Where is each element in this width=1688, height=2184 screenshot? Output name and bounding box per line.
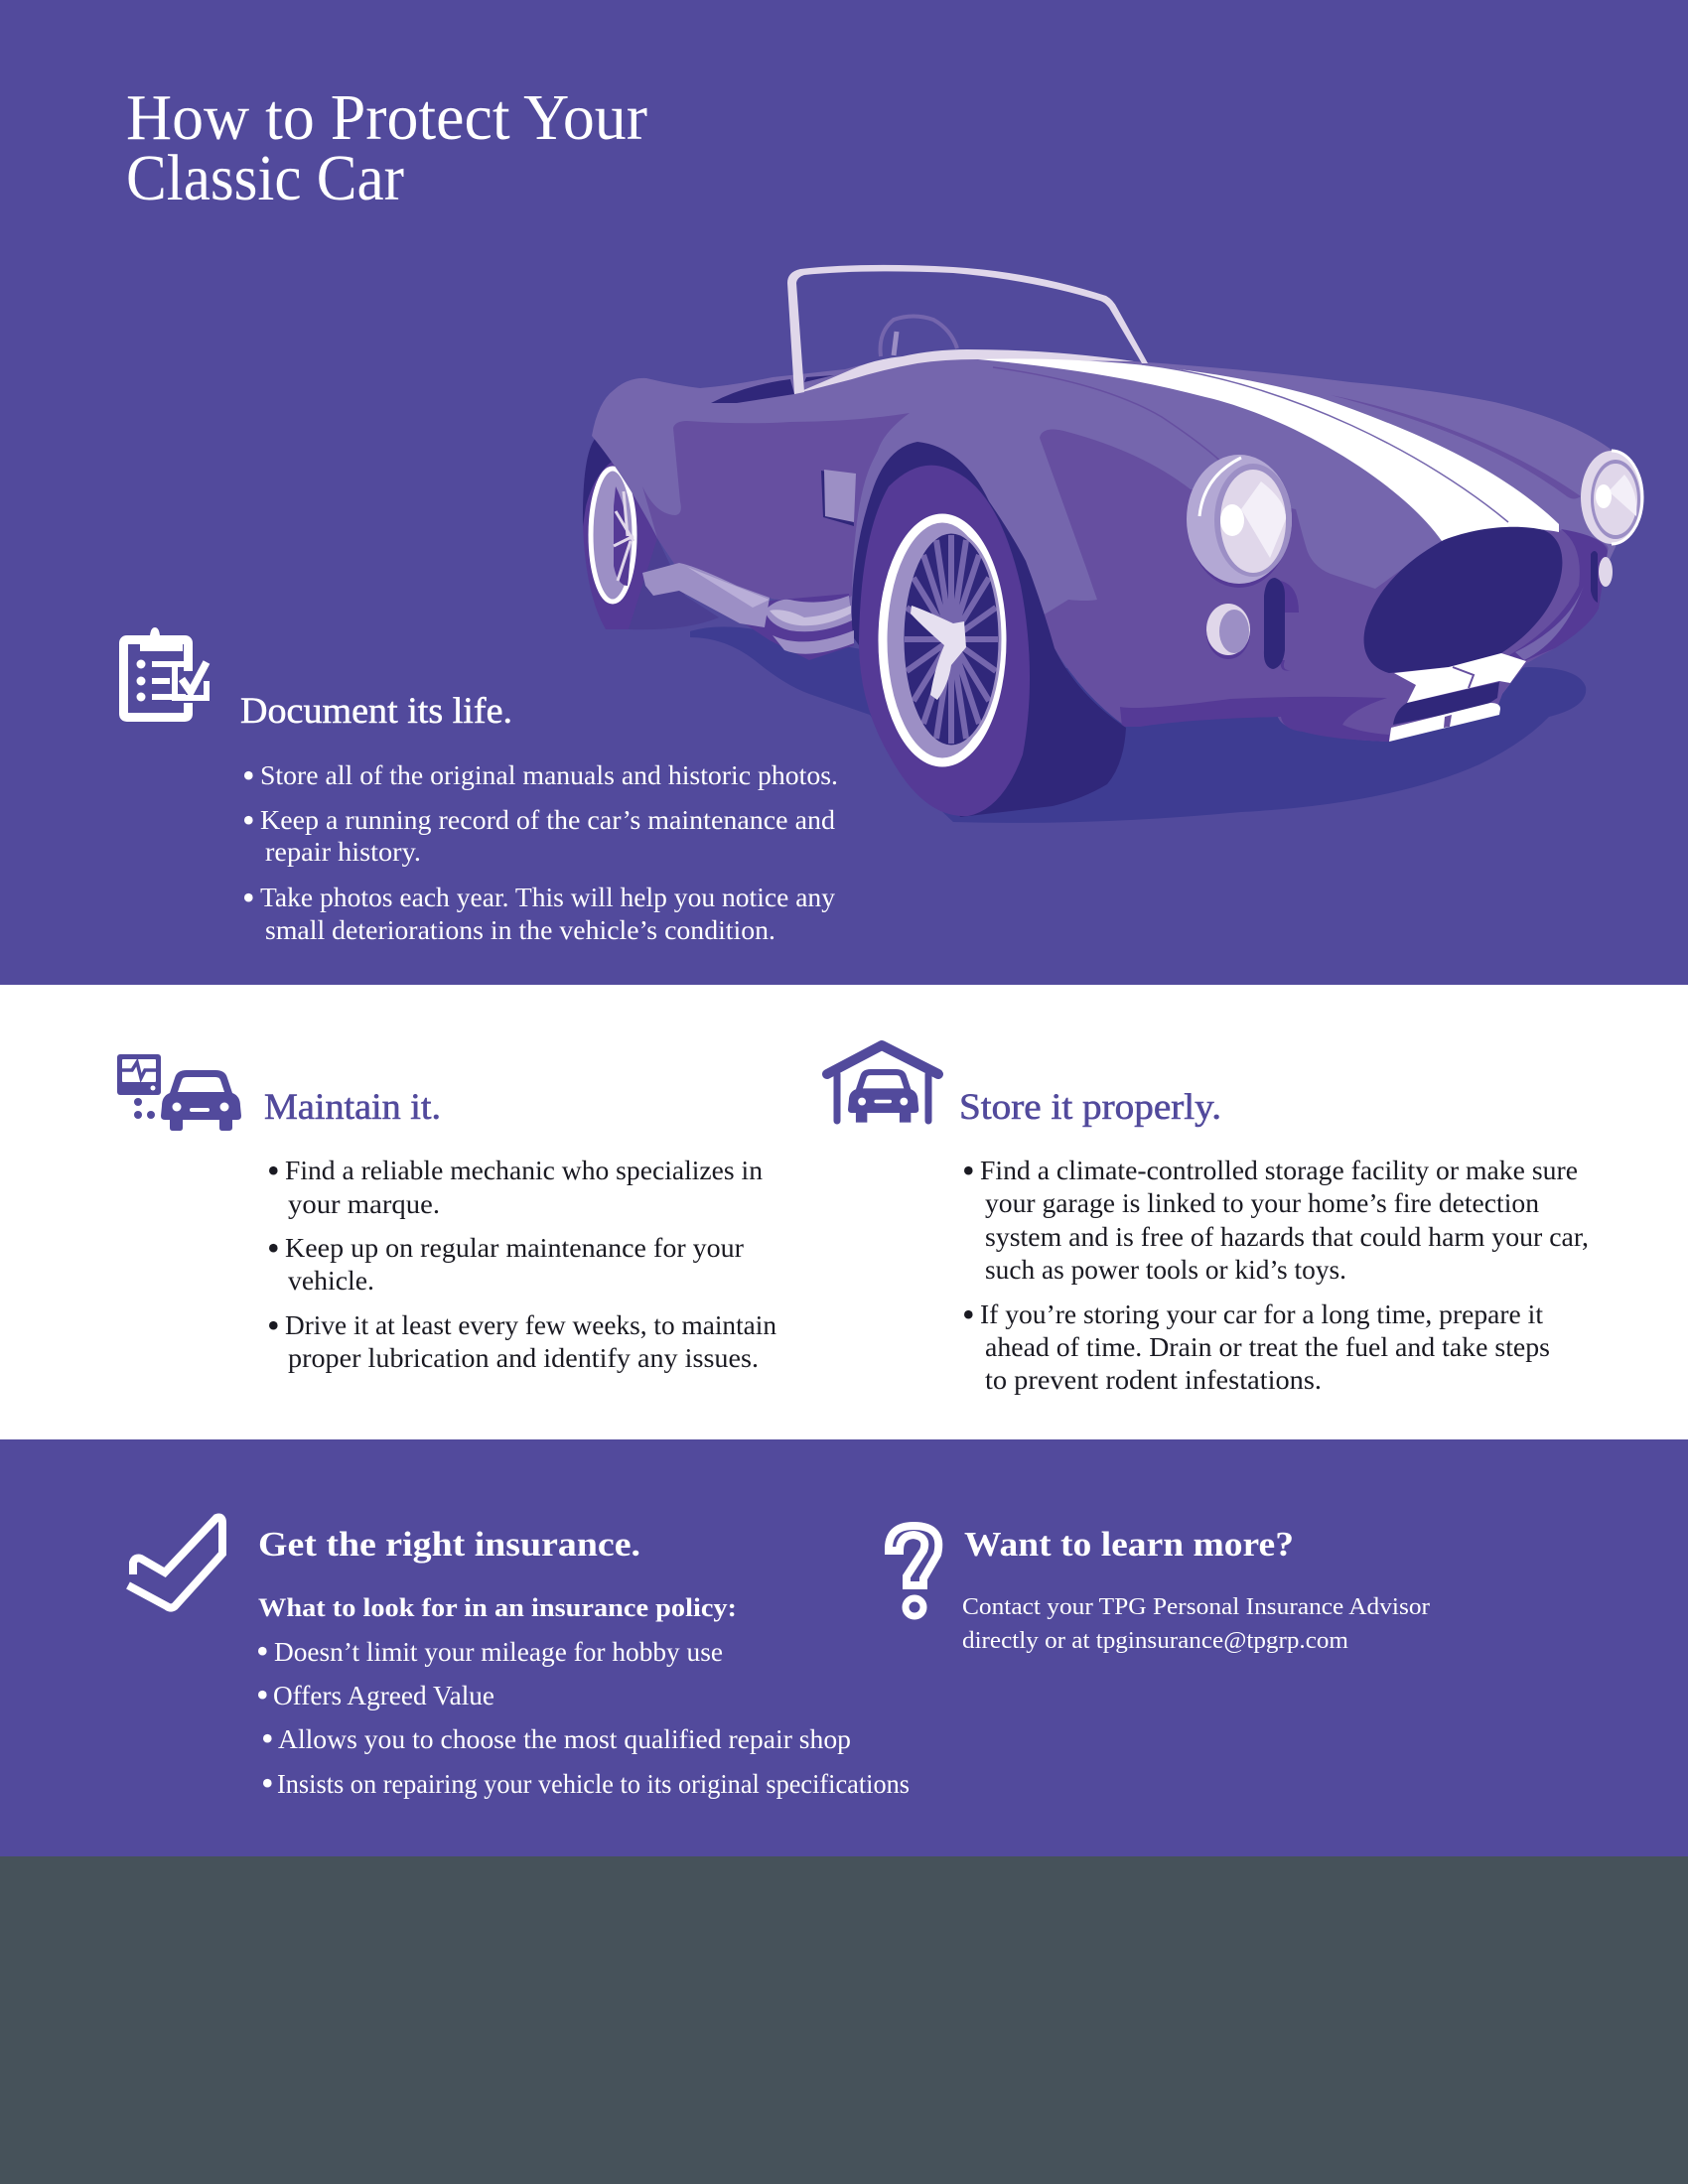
bullet list: maintain it: • [267, 1305, 280, 1345]
bullet list: store it properly: • [962, 1295, 975, 1334]
bullet list: maintain it: Keep up on regular maintenance for your [285, 1232, 744, 1263]
heading: document its life: Document its life. [240, 691, 512, 732]
cockpit opening [711, 375, 834, 403]
hood shadow band [1331, 395, 1581, 498]
front bumper [1389, 653, 1526, 742]
roll bar [881, 316, 957, 356]
icon: question mark [885, 1526, 938, 1616]
side panel [642, 413, 910, 607]
heading: get the right insurance: Get the right insurance. [258, 1525, 640, 1564]
bullet list: store it properly: your garage is linked to your home’s fire detection [985, 1187, 1539, 1218]
bullet list: maintain it [267, 1151, 776, 1373]
panel: dark grey footer [0, 1856, 1688, 2184]
ground shadow [690, 626, 1586, 823]
heading: want to learn more: Want to learn more? [964, 1525, 1294, 1564]
bullet list: insurance policy [256, 1631, 910, 1803]
bullet list: insurance policy: Insists on repairing your vehicle to its original specifications [277, 1768, 910, 1799]
bullet list: document its life: small deteriorations in the vehicle’s condition. [265, 914, 775, 945]
bullet list: maintain it: • [267, 1151, 280, 1190]
icon: monitor and car [117, 1054, 241, 1131]
bullet list: maintain it: proper lubrication and identify any issues. [288, 1342, 759, 1373]
bullet list: maintain it: Drive it at least every few weeks, to maintain [285, 1309, 776, 1340]
bullet list: insurance policy: • [256, 1631, 269, 1671]
bullet list: insurance policy: Allows you to choose the most qualified repair shop [278, 1723, 851, 1754]
stripe centre line [1142, 364, 1508, 522]
bullet list: insurance policy: Doesn’t limit your mileage for hobby use [274, 1636, 723, 1667]
bullet list: document its life [242, 755, 838, 945]
bullet list: document its life: repair history. [265, 836, 421, 867]
icon: check mark [128, 1518, 222, 1608]
illustration: classic car [583, 265, 1642, 823]
panel: top purple background [0, 0, 1688, 985]
panel: bottom purple section [0, 1439, 1688, 1856]
front tyre [859, 466, 1030, 816]
heading: maintain it: Maintain it. [264, 1087, 441, 1128]
right headlight [1581, 451, 1642, 544]
rear tyre [583, 435, 719, 629]
bullet list: insurance policy: • [256, 1675, 269, 1714]
nose side [1509, 529, 1608, 663]
left headlight [1187, 455, 1292, 588]
bullet list: insurance policy: Offers Agreed Value [273, 1680, 494, 1710]
bullet list: store it properly: such as power tools or kid’s toys. [985, 1254, 1346, 1285]
contact text [962, 1594, 1430, 1654]
bullet list: maintain it: • [267, 1228, 280, 1268]
front lower body [1040, 430, 1609, 742]
bullet list: insurance policy: • [261, 1763, 274, 1803]
subheading: what to look for: What to look for in an insurance policy: [258, 1593, 737, 1622]
side vent [821, 470, 856, 526]
contact text: directly or at tpginsurance@tpgrp.com [962, 1628, 1348, 1654]
exhaust pipes [642, 563, 854, 660]
grille opening [1364, 527, 1562, 673]
bullet list: maintain it: vehicle. [288, 1265, 374, 1296]
car body silhouette [592, 350, 1620, 742]
bullet list: document its life: • [242, 755, 255, 795]
panel: white middle section [0, 985, 1688, 1439]
contact text: Contact your TPG Personal Insurance Advisor [962, 1594, 1430, 1620]
bullet list: maintain it: your marque. [288, 1188, 440, 1219]
bullet list: store it properly: to prevent rodent infestations. [985, 1364, 1322, 1395]
bullet list: document its life: • [242, 878, 255, 917]
windshield frame [787, 265, 1148, 394]
bullet list: store it properly: If you’re storing your car for a long time, prepare it [980, 1298, 1543, 1329]
bullet list: document its life: • [242, 800, 255, 840]
bullet list: store it properly: Find a climate-controlled storage facility or make sure [980, 1155, 1578, 1185]
bullet list: insurance policy: • [261, 1718, 274, 1758]
bullet list: store it properly: system and is free of hazards that could harm your car, [985, 1221, 1589, 1252]
front wheel [883, 518, 1002, 762]
icon: clipboard checklist [123, 627, 207, 717]
wheel arch [852, 442, 1126, 817]
title [126, 81, 647, 214]
bullet list: maintain it: Find a reliable mechanic who specializes in [285, 1155, 763, 1185]
white racing stripe [978, 358, 1559, 541]
bullet list: document its life: Take photos each year. This will help you notice any [260, 882, 835, 912]
heading: store it properly: Store it properly. [959, 1087, 1221, 1128]
icon: car in garage [827, 1045, 938, 1123]
vent slot [1264, 578, 1299, 671]
bullet list: document its life: Keep a running record of the car’s maintenance and [260, 804, 835, 835]
bullet list: document its life: Store all of the original manuals and historic photos. [260, 759, 838, 790]
fog lamp [1206, 604, 1250, 659]
bonnet crease [993, 367, 1226, 467]
title: How to Protect Your [126, 81, 647, 154]
bullet list: store it properly: ahead of time. Drain or treat the fuel and take steps [985, 1331, 1550, 1362]
title: Classic Car [126, 142, 404, 214]
cowl strip [794, 349, 1134, 394]
side marker and slot [1591, 551, 1613, 603]
bullet list: store it properly: • [962, 1151, 975, 1190]
bullet list: store it properly [962, 1151, 1589, 1395]
front skirt [1120, 697, 1389, 742]
